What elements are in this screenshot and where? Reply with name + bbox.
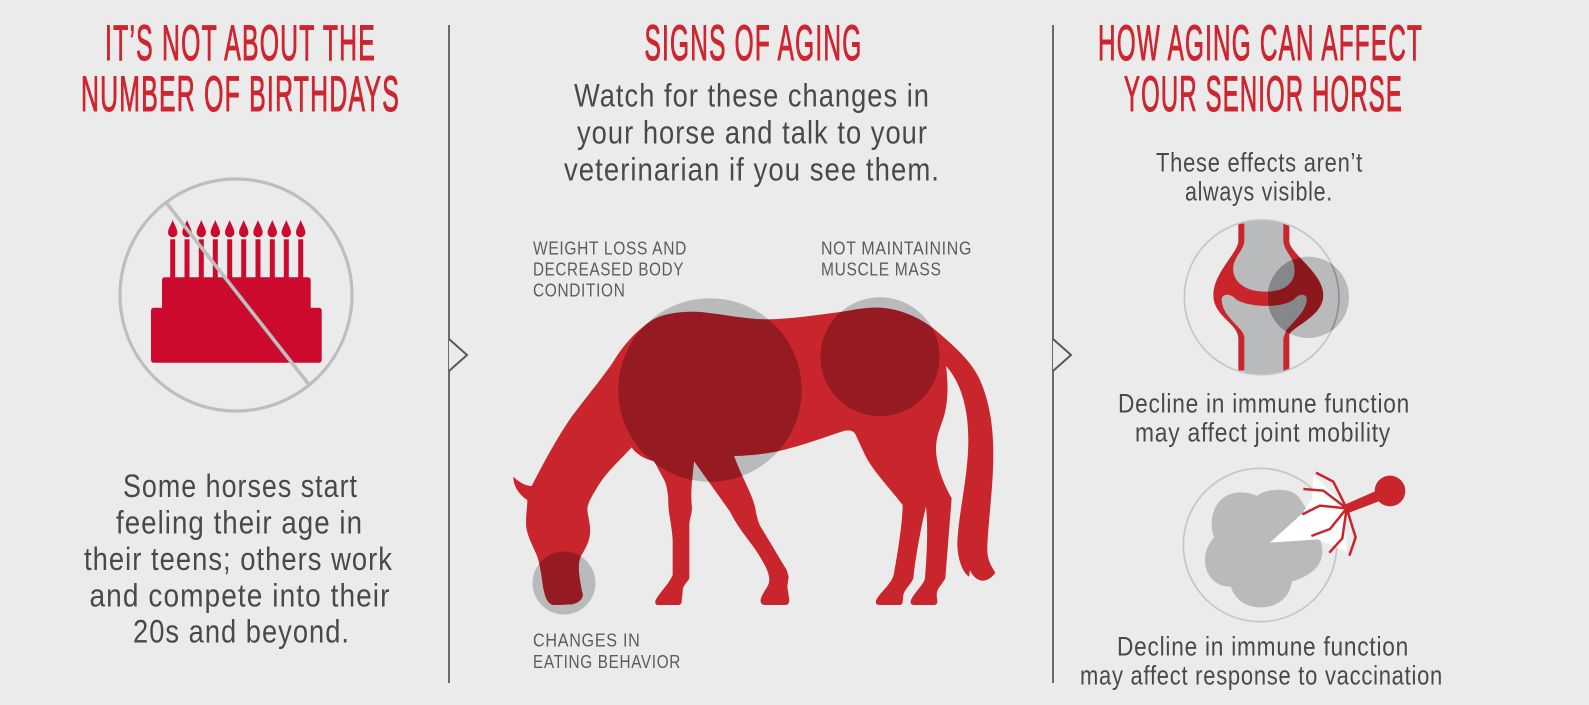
text: some horses: and compete into their <box>90 578 390 614</box>
joint cartilage <box>1213 223 1300 371</box>
intro text: veterinarian if you see them. <box>564 152 940 188</box>
text: some horses: 20s and beyond. <box>133 614 350 650</box>
label: weight loss: WEIGHT LOSS AND <box>533 238 687 258</box>
highlight circles <box>532 297 940 614</box>
text: NUMBER OF BIRTHDAYS <box>81 66 400 122</box>
label: weight loss: CONDITION <box>533 280 626 301</box>
panel: not about birthdays <box>81 15 400 650</box>
icon: joint <box>1184 220 1349 377</box>
text: joint mobility: may affect joint mobility <box>1135 418 1391 448</box>
text: response to vaccination: may affect response to vaccination <box>1080 660 1443 690</box>
intro text: Watch for these changes in <box>574 78 930 114</box>
horse silhouette <box>513 308 995 605</box>
heading: how aging <box>1098 15 1423 122</box>
label: muscle mass: MUSCLE MASS <box>821 259 942 280</box>
circle overlaps on horse <box>532 297 940 614</box>
inflamed area <box>1268 257 1349 338</box>
text: response to vaccination <box>1080 632 1443 690</box>
label: muscle mass <box>821 238 972 280</box>
panel: signs of aging <box>513 15 995 672</box>
text: some horses: feeling their age in <box>116 505 363 541</box>
ring <box>1183 468 1337 622</box>
icon: cell and virus <box>1183 468 1405 622</box>
intro text: your horse and talk to your <box>577 114 928 150</box>
text: some horses: Some horses start <box>123 468 358 504</box>
label: eating behavior: CHANGES IN <box>533 630 640 650</box>
text: joint mobility <box>1118 388 1410 448</box>
panel: signs of aging: SIGNS OF AGING <box>644 15 862 71</box>
text: effects not visible: These effects aren’t <box>1156 148 1363 178</box>
label: eating behavior: EATING BEHAVIOR <box>533 651 681 672</box>
heading: birthdays: IT’S NOT ABOUT THE <box>105 15 376 71</box>
divider with arrow 1 <box>449 25 467 683</box>
label: weight loss: DECREASED BODY <box>533 259 684 280</box>
intro text <box>564 78 940 188</box>
ring within inflamed area <box>1330 263 1340 332</box>
text: effects not visible <box>1156 148 1363 206</box>
white wedge <box>1270 475 1347 552</box>
divider with arrow 2 <box>1053 25 1071 683</box>
text: effects not visible: always visible. <box>1185 176 1333 206</box>
inflamed area over cartilage <box>1268 258 1324 334</box>
icon: crossed-out birthday cake <box>120 179 352 411</box>
text: response to vaccination: Decline in immune function <box>1117 632 1409 662</box>
text: some horses: their teens; others work <box>84 541 393 577</box>
prohibition ring <box>120 179 352 411</box>
label: eating behavior <box>533 630 681 672</box>
label: weight loss <box>533 238 687 301</box>
cake tiers <box>151 277 322 363</box>
candles <box>168 220 305 278</box>
inflamed area over bone <box>1268 260 1307 331</box>
text: joint mobility: Decline in immune function <box>1118 388 1410 418</box>
text: some horses <box>84 468 393 650</box>
joint ring <box>1184 220 1339 375</box>
horse illustration <box>513 297 995 614</box>
virus <box>1302 473 1405 556</box>
heading: birthdays <box>81 15 400 122</box>
panel: how aging can affect <box>1080 15 1443 690</box>
immune cell <box>1205 490 1322 607</box>
bones <box>1222 220 1292 374</box>
label: muscle mass: NOT MAINTAINING <box>821 238 972 258</box>
